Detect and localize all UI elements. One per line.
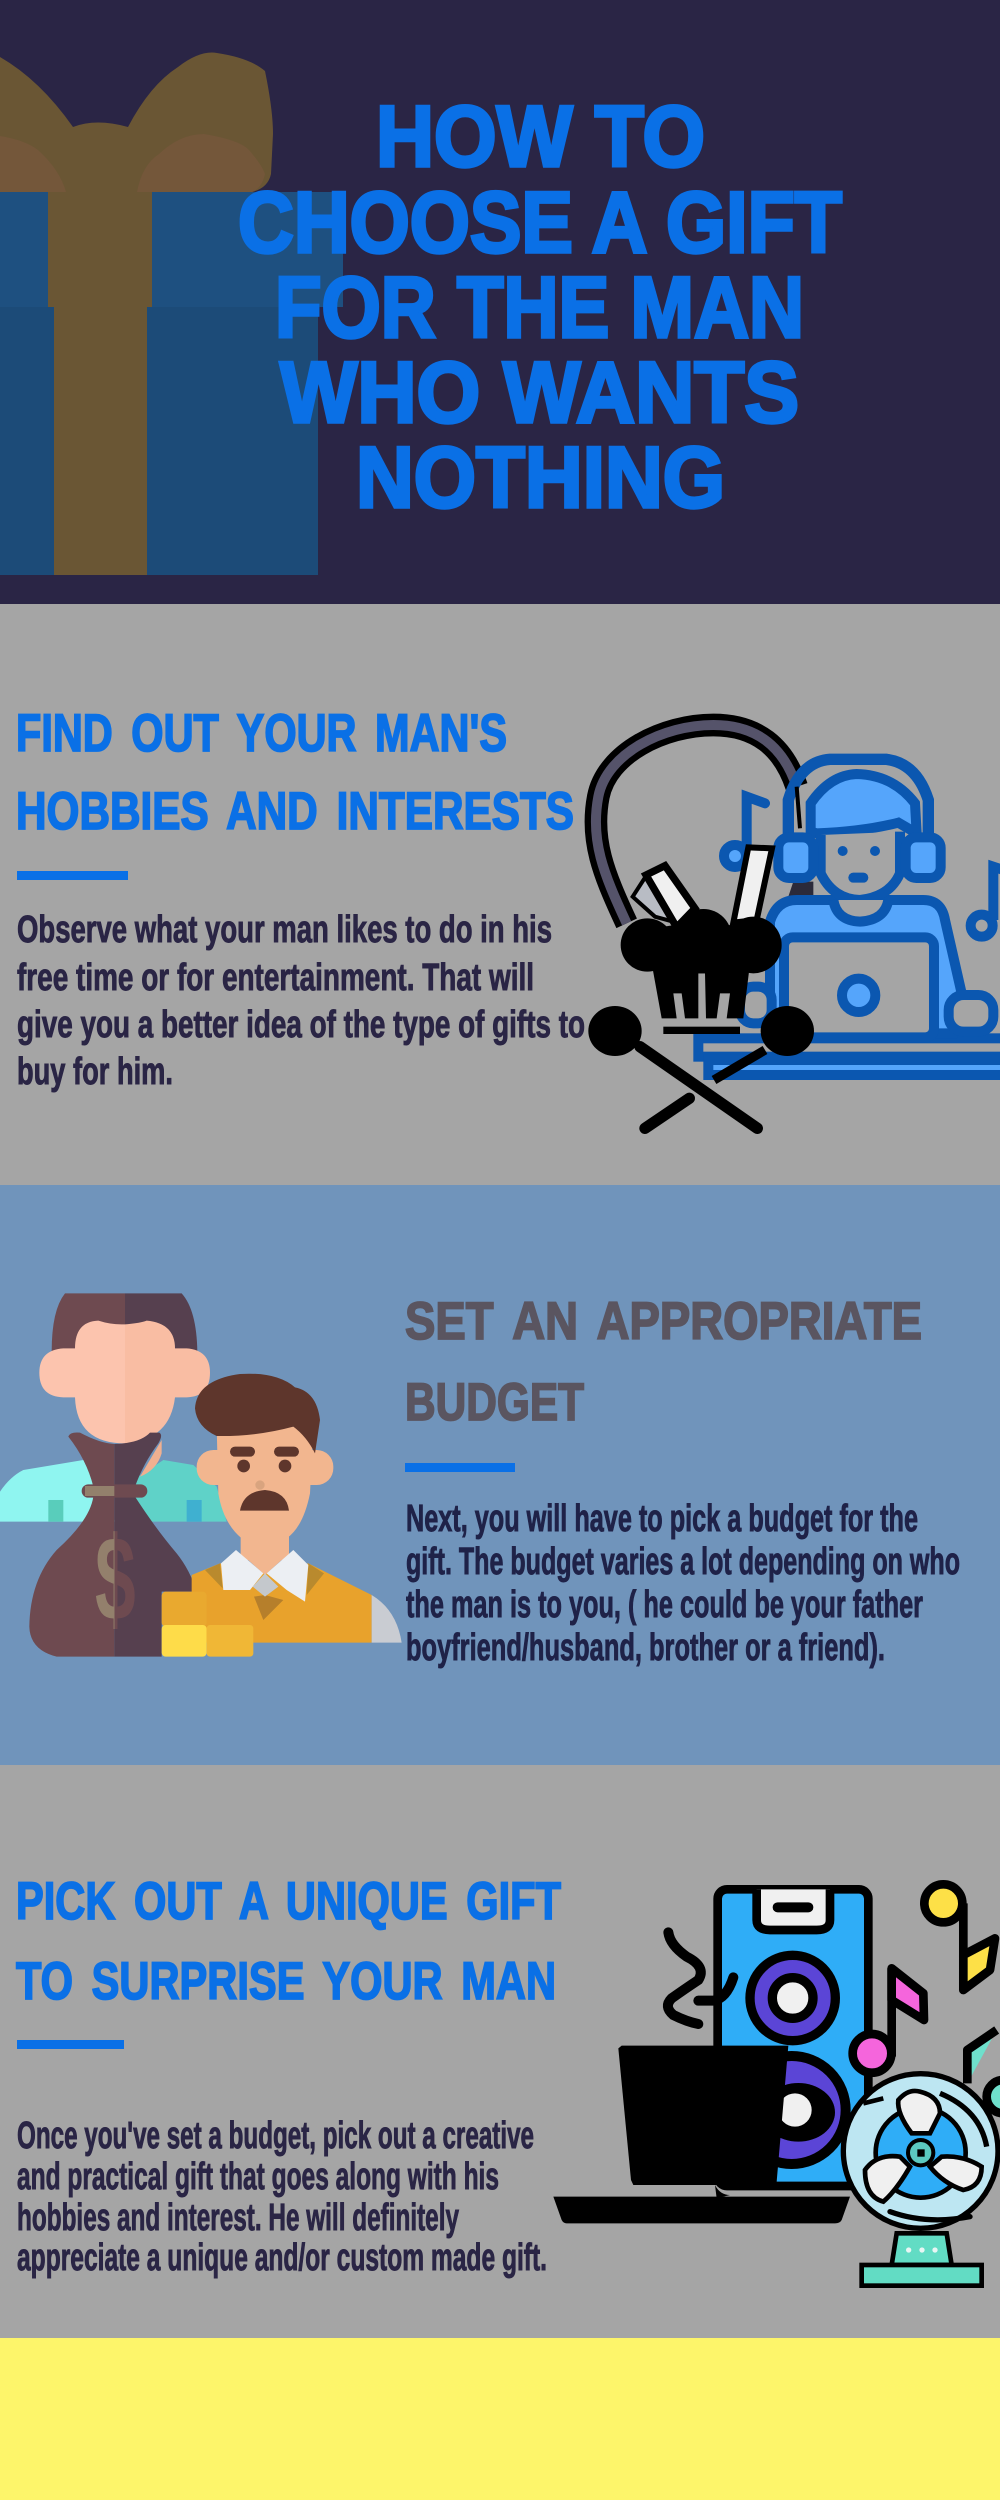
heading: find out hobbies: HOBBIES AND INTERESTS <box>16 782 574 841</box>
icon: faceless man behind <box>0 1293 227 1522</box>
panel: header <box>0 0 1000 604</box>
icon: desk fan <box>843 2074 998 2286</box>
title <box>238 89 842 526</box>
panel: set a budget <box>0 1185 1000 1765</box>
panel: yellow footer <box>0 2338 1000 2500</box>
title: NOTHING <box>356 430 725 526</box>
heading: pick a unique gift: PICK OUT A UNIQUE GIFT <box>16 1872 561 1931</box>
icon: money bag <box>29 1432 197 1657</box>
text block: next <box>406 1498 960 1669</box>
heading: set a budget: SET AN APPROPRIATE <box>405 1292 922 1351</box>
panel: unique gift <box>0 1765 1000 2338</box>
heading: pick a unique gift <box>16 1872 561 2011</box>
title: WHO WANTS <box>280 345 799 441</box>
heading: find out hobbies: FIND OUT YOUR MAN'S <box>16 704 507 763</box>
heading: find out hobbies <box>16 704 574 841</box>
icon: money bag: $ <box>95 1512 136 1646</box>
icon: headset ear pads <box>633 787 800 927</box>
heading: set a budget: BUDGET <box>405 1373 584 1432</box>
text block: once <box>17 2115 547 2279</box>
title: CHOOSE A GIFT <box>238 175 842 271</box>
text block: observe: buy for him. <box>17 1051 173 1093</box>
text block: observe: Observe what your man likes to do in his <box>17 909 552 951</box>
icon: coffee cup with steam <box>553 1932 850 2223</box>
icon: music notes <box>853 1884 1000 2113</box>
icon: chef hat and crossed spoons <box>588 909 814 1128</box>
panel: hobbies and interests <box>0 604 1000 1185</box>
text block: observe <box>17 909 585 1093</box>
text block: observe: free time or for entertainment. That will <box>17 957 534 999</box>
text block: observe: give you a better idea of the type of gifts to <box>17 1004 585 1046</box>
icon: coins <box>162 1592 253 1657</box>
title: FOR THE MAN <box>275 260 804 356</box>
icon: gift box <box>0 53 343 575</box>
text block: once: Once you've set a budget, pick out a creative <box>17 2115 534 2157</box>
heading: pick a unique gift: TO SURPRISE YOUR MAN <box>16 1952 556 2011</box>
text block: once: appreciate a unique and/or custom made gift. <box>17 2237 547 2279</box>
icon: person with headphones at laptop <box>698 759 1000 1075</box>
icon: man with moustache <box>192 1374 402 1643</box>
icon: speaker <box>718 1889 868 2186</box>
text block: once: hobbies and interest. He will definitely <box>17 2197 459 2239</box>
text block: once: and practical gift that goes along with his <box>17 2156 499 2198</box>
heading: set a budget <box>405 1292 922 1432</box>
icon: headset <box>596 725 813 923</box>
title: HOW TO <box>376 89 705 185</box>
